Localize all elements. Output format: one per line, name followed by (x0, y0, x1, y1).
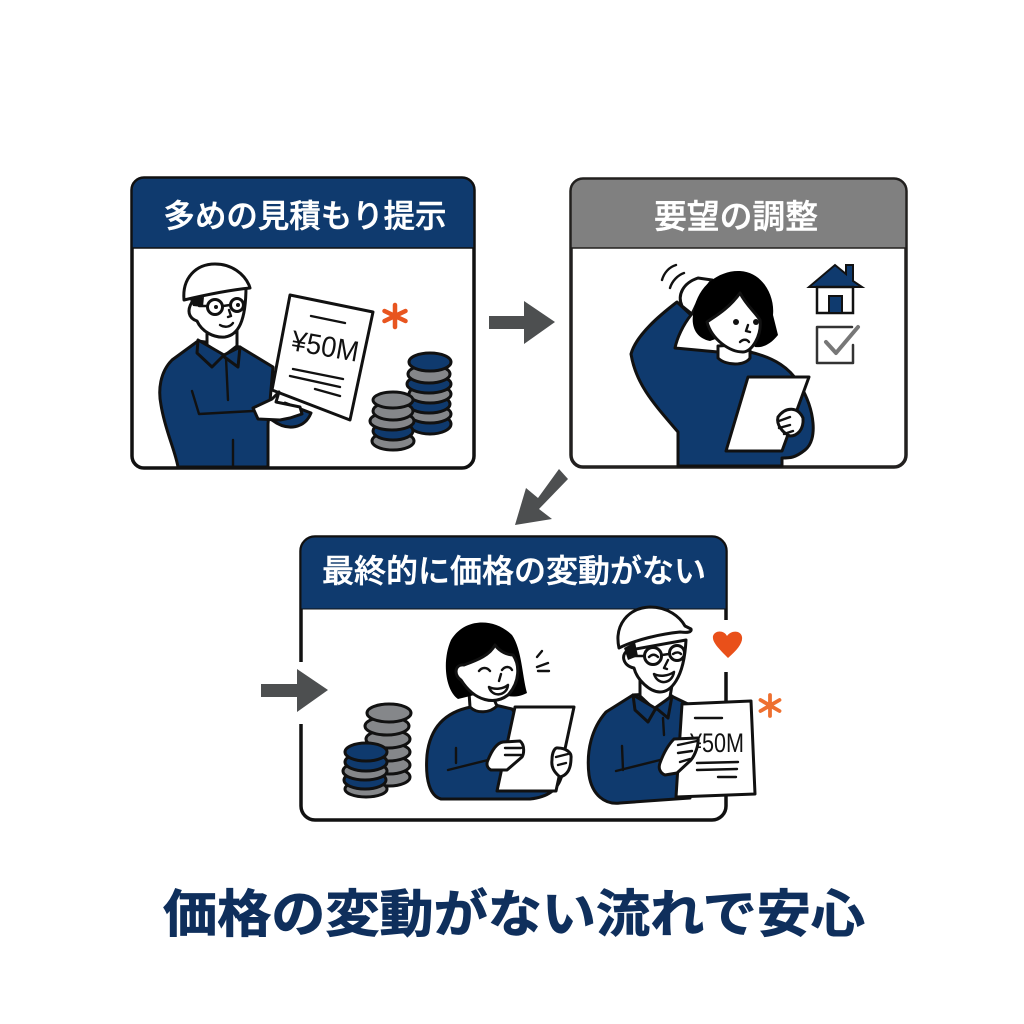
smiling woman with paper (427, 622, 574, 799)
icon: checkbox (817, 327, 858, 363)
document: ¥50M estimate (272, 295, 373, 420)
icon: orange asterisk (384, 305, 406, 327)
panel: final no price change (297, 537, 780, 820)
happy worker with estimate (588, 607, 755, 803)
document: ¥50M estimate: ¥50M (288, 325, 361, 369)
panel header: final: 最終的に価格の変動がない (322, 553, 706, 589)
title: 価格の変動がない流れで安心 (163, 886, 865, 943)
panel: adjust requests (571, 179, 906, 467)
panel header: adjust requests: 要望の調整 (654, 198, 818, 235)
coin stacks (343, 704, 411, 797)
panel header: final (301, 537, 726, 609)
gaps in panel border (297, 620, 731, 724)
icon: house (809, 265, 862, 313)
icon: orange asterisk (760, 695, 780, 716)
happy worker with estimate: ¥50M (689, 728, 744, 758)
panel: estimate (132, 178, 474, 468)
icon: heart (713, 632, 742, 658)
arrow: panel 2 to panel 3 (515, 469, 568, 525)
panel header: estimate: 多めの見積もり提示 (164, 198, 446, 234)
panel header: adjust requests (571, 179, 906, 248)
coin stacks (370, 353, 451, 450)
arrow: panel 1 to panel 2 (489, 301, 555, 344)
worried woman with paper (631, 265, 813, 466)
hand holding document (253, 392, 302, 420)
arrow: into panel 3 (261, 669, 328, 712)
worker with estimate (160, 264, 311, 467)
panel header: estimate (132, 178, 474, 248)
